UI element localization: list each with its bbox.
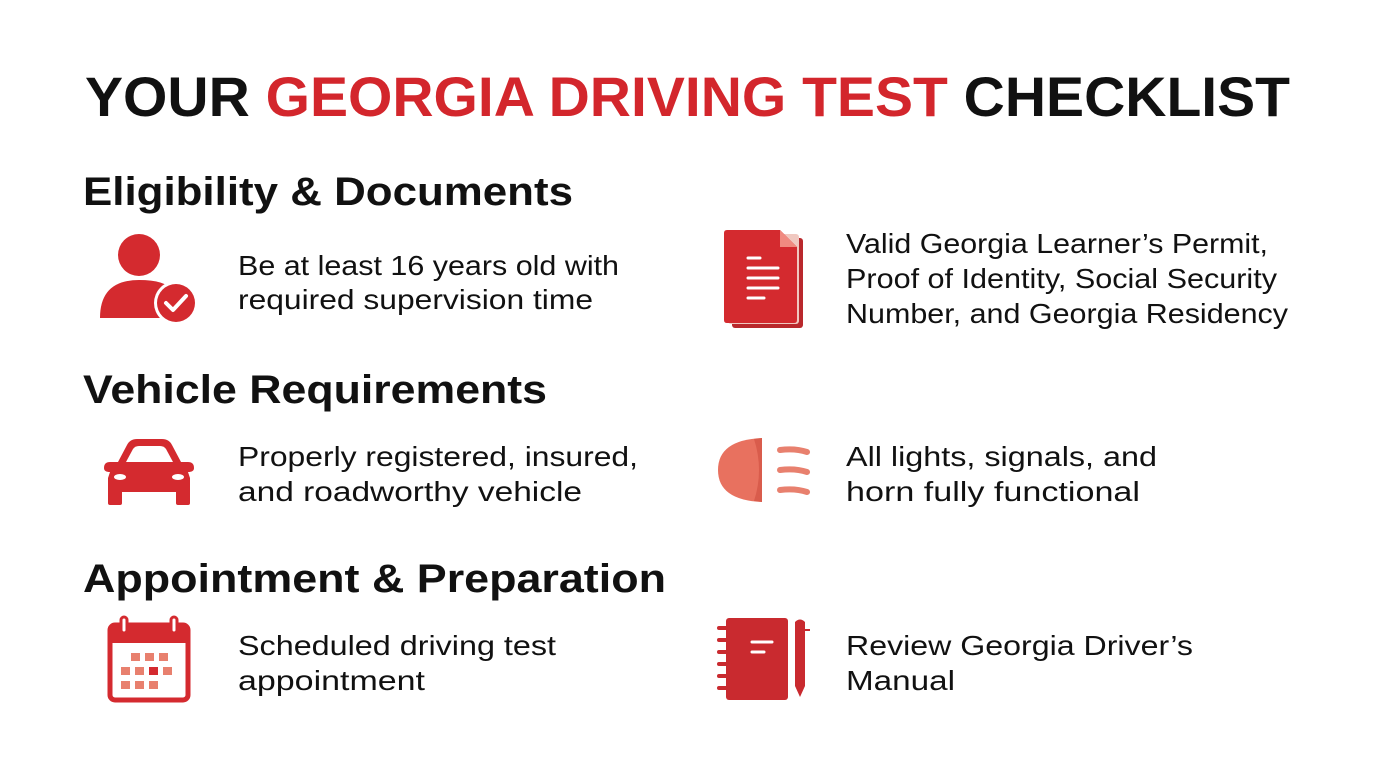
text: manual: Review Georgia Driver’s — [846, 630, 1193, 661]
text: appointment: appointment — [238, 665, 425, 696]
icon: person check — [100, 234, 198, 325]
text: documents: Number, and Georgia Residency — [846, 298, 1288, 329]
text: appointment: Scheduled driving test — [238, 630, 556, 661]
text: documents: Valid Georgia Learner’s Permit, — [846, 228, 1268, 259]
text: manual: Manual — [846, 665, 955, 696]
icon: notebook — [719, 618, 810, 700]
icon: car — [104, 439, 194, 505]
text: age: Be at least 16 years old with — [238, 250, 619, 281]
icon: headlight — [718, 438, 807, 502]
text: age: required supervision time — [238, 284, 593, 315]
text: vehicle: Properly registered, insured, — [238, 441, 638, 472]
icon: documents — [724, 230, 803, 328]
icon: calendar — [110, 617, 188, 700]
heading: eligibility: Eligibility & Documents — [83, 170, 573, 214]
heading: vehicle: Vehicle Requirements — [83, 368, 547, 412]
text: documents: Proof of Identity, Social Security — [846, 263, 1277, 294]
text: vehicle: and roadworthy vehicle — [238, 476, 582, 507]
text: lights: horn fully functional — [846, 476, 1140, 507]
text: lights: All lights, signals, and — [846, 441, 1157, 472]
heading: appointment: Appointment & Preparation — [83, 557, 666, 601]
title: YOUR GEORGIA DRIVING TEST CHECKLIST — [85, 65, 1290, 128]
